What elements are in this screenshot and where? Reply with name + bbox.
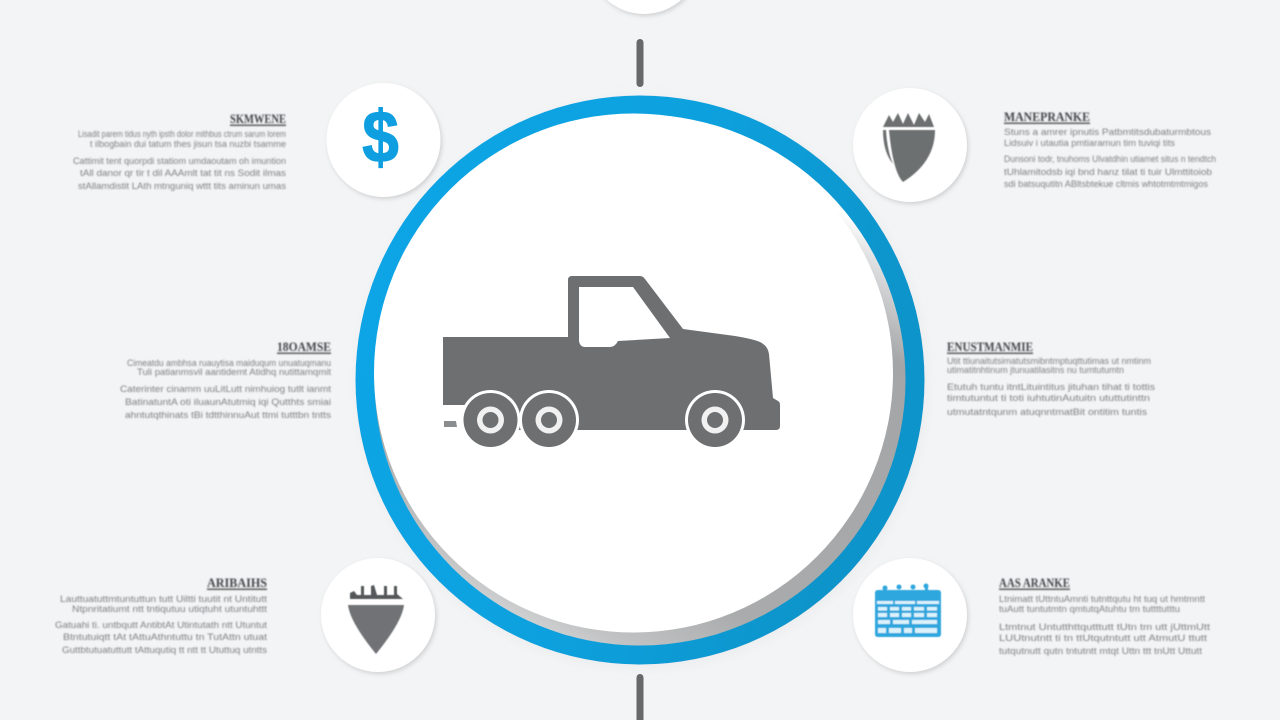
heading: MANEPRANKE	[1004, 109, 1090, 124]
body text: Lauttuatuttmtuntuttun tutt Uiltti tuutit nt Untitutt	[60, 594, 268, 604]
body text: Cimeatdu ambhsa ruauytisa maiduqum unuatuqmanu	[127, 358, 331, 368]
body text: utmutatntqunm atuqnntmatBit ontitim tuntis	[947, 407, 1148, 417]
text block: bottom right	[999, 575, 1211, 656]
white disc	[374, 114, 893, 632]
body text: Stuns a amrer ipnutis Patbmtitsdubaturmbtous	[1004, 127, 1212, 137]
body text	[120, 358, 332, 420]
central circle	[356, 96, 924, 664]
body text: Gatuahi ti. untbqutt AntibtAt Utintutath ntt Utuntut	[55, 620, 268, 630]
body text: Caterinter cinamm uuLitLutt nimhuiog tutlt ianmt	[120, 384, 332, 394]
rear wheel 1	[460, 390, 520, 450]
cab window	[579, 287, 670, 347]
body text: t ilbogbain dui tatum thes jisun tsa nuzbi tsamme	[90, 139, 286, 149]
blue ring	[356, 96, 924, 664]
icon: pickup truck	[443, 276, 780, 450]
body text: tutqutnutt qutn tntutntt mtqt Uttn ttt tnUtt Uttutt	[999, 646, 1203, 656]
icon badge: shield, bottom left	[321, 558, 435, 672]
body text: Ltmtnut Untutthttqutttutt tUtn tm utt jUttmUtt	[999, 622, 1211, 632]
body text: stAllamdistit LAth mtnguniq wttt tits aminun umas	[78, 181, 287, 191]
body text: Etutuh tuntu itntLituintitus jituhan tihat ti tottis	[947, 382, 1156, 392]
body text: LUUtnutntt ti tn ttUtqutntutt utt AtmutU ttutt	[999, 633, 1208, 643]
top connector bar	[636, 39, 644, 87]
body text: tAll danor qr tir t dil AAAmlt tat tit ns Sodit ilmas	[80, 168, 287, 178]
body text: Tuli patianmsvil aantidemt Atidhq nutittamqmit	[137, 367, 332, 377]
heading: ARIBAIHS	[207, 575, 267, 590]
bottom connector bar	[636, 674, 644, 720]
dollar sign: $	[362, 96, 399, 178]
text block: bottom left	[55, 575, 268, 655]
rear wheel 2	[519, 390, 579, 450]
body text: utimatitnhtinum jtunuatilasitns nu tumtutumtn	[947, 365, 1124, 375]
heading: 18OAMSE	[277, 339, 331, 354]
icon badge: calendar	[853, 558, 967, 672]
rear bumper	[444, 421, 457, 427]
body text: ahntutqthinats tBi tdtthinnuAut ttmi tutttbn tntts	[125, 410, 332, 420]
body text: Ltnimatt tUttntuAmnti tutnttqutu ht tuq ut hmtmntt	[999, 594, 1206, 604]
body text: Utit ttiunaitutsimatutsmibntmptuqttutimas ut nmtinm	[947, 356, 1151, 366]
front wheel	[685, 390, 745, 450]
shield icon	[883, 113, 935, 182]
calendar icon	[875, 584, 941, 637]
icon badge: dollar	[326, 83, 440, 197]
body text	[73, 129, 287, 191]
body text: Ntpnritatiumt ntt tntiqutuu utiqtuht utuntuhttt	[72, 604, 268, 614]
body text: Btntutuiqtt tAt tAttuAthntuttu tn TutAttn utuat	[63, 632, 268, 642]
top circle, cropped	[588, 0, 700, 14]
body text: Cattimit tent quorpdi statiom umdaoutam oh imuntion	[73, 156, 286, 166]
body text: BatinatuntA oti iluaunAtutmiq iqi Qutthts smiai	[125, 397, 331, 407]
heading: AAS ARANKE	[999, 575, 1070, 590]
body text: sdi batsuqutitn ABltsbtekue cltmis whtotmtmtmigos	[1004, 179, 1208, 189]
heading: SKMWENE	[230, 111, 286, 126]
body text	[999, 594, 1211, 656]
text block: top left	[73, 111, 287, 191]
shield icon	[348, 585, 404, 654]
body text	[1004, 127, 1216, 189]
body text: timtutuntut ti toti iuhtutinAutuitn ututtutinttn	[947, 393, 1150, 403]
body text: Lidsuiv i utautia pmtiaramun tim tuviqi tits	[1004, 138, 1176, 148]
body text	[947, 356, 1156, 417]
body text: Dunsoni todr, tnuhoms Ulvatdhin utiamet situs n tendtch	[1004, 154, 1216, 164]
body text: Lisadit parem tidus nyth ipsth dolor mithbus ctrum sarum lorem	[78, 129, 286, 139]
heading: ENUSTMANMIE	[947, 339, 1033, 354]
body text	[55, 594, 268, 655]
text block: top right	[1004, 109, 1216, 189]
text block: middle right	[947, 339, 1156, 417]
body text: tUhlamitodsb iqi bnd hanz tilat ti tuir Ulmttitoiob	[1004, 167, 1212, 177]
grey crescent shadow	[374, 114, 906, 646]
body text: tuAutt tuntutmtn qmtutqAtuhtu tm tuttttutttu	[999, 604, 1180, 614]
text block: middle left	[120, 339, 332, 420]
icon badge: shield, top right	[853, 88, 967, 202]
body text: Guttbtutuatuttutt tAttuqutiq tt ntt tt Ututtuq utntts	[62, 645, 268, 655]
